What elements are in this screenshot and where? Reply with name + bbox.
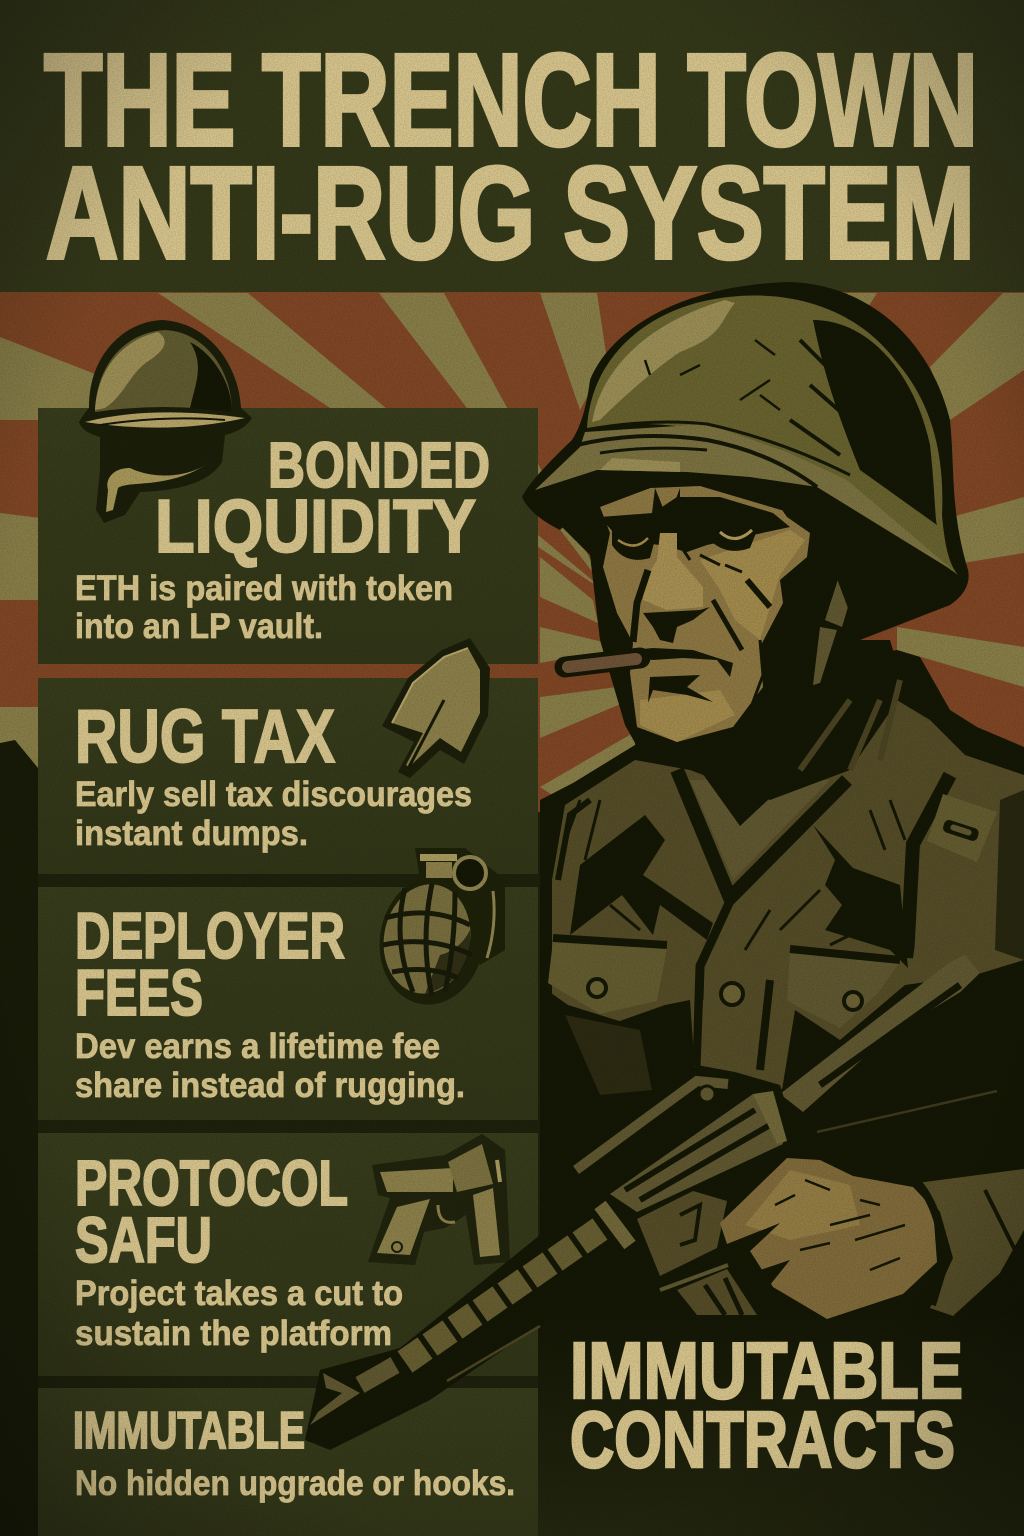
icon: pistol — [368, 1134, 510, 1265]
mouth — [633, 648, 733, 677]
description: Early sell tax discourages — [75, 775, 472, 814]
magazine — [677, 1269, 757, 1315]
panel: deployer fees: FEES — [75, 956, 203, 1029]
lower dark — [540, 960, 1024, 1250]
panel: protocol safu — [38, 1133, 538, 1376]
stock — [780, 955, 980, 1112]
shirt — [540, 690, 1024, 1250]
sleeve cuff — [915, 1169, 1024, 1316]
panel: bonded liquidity — [38, 320, 538, 664]
nose — [643, 533, 703, 610]
muzzle and front sight — [310, 1373, 360, 1425]
pockets — [548, 941, 667, 1014]
panel: bonded liquidity: into an LP vault. — [75, 607, 323, 646]
face — [600, 483, 810, 742]
shoulder strap tab — [927, 794, 997, 862]
soldier body silhouette — [540, 650, 1024, 1315]
title text — [44, 26, 978, 286]
eyes — [612, 528, 658, 560]
heading: BONDED — [268, 429, 490, 501]
chin strap — [813, 567, 860, 685]
icon: grenade — [370, 848, 505, 1013]
handguard sections — [405, 1229, 600, 1362]
description: No hidden upgrade or hooks. — [75, 1464, 515, 1503]
heading: DEPLOYER — [75, 899, 345, 972]
buttons — [588, 979, 862, 1010]
panel: deployer fees: share instead of rugging. — [75, 1066, 465, 1105]
panel: protocol safu: SAFU — [75, 1204, 212, 1276]
heading: RUG TAX — [75, 694, 335, 778]
hand — [720, 1158, 937, 1319]
rifle — [305, 955, 1003, 1450]
heading: IMMUTABLE — [73, 1402, 305, 1460]
illustration: soldier — [305, 282, 1024, 1450]
panel: deployer fees — [38, 848, 538, 1120]
head shadow — [560, 470, 950, 755]
description: Project takes a cut to — [75, 1274, 403, 1313]
carry handle — [576, 1081, 728, 1170]
brim — [535, 424, 955, 572]
brow — [600, 497, 790, 552]
left dark hill silhouette — [0, 740, 38, 1536]
panel: immutable — [38, 1388, 538, 1536]
sunburst background — [0, 292, 1024, 812]
description: Dev earns a lifetime fee — [75, 1027, 440, 1066]
title band — [0, 0, 1024, 292]
panel: rug tax — [38, 638, 538, 874]
helmet — [522, 282, 969, 640]
heading: PROTOCOL — [75, 1147, 348, 1219]
description: ETH is paired with token — [75, 569, 453, 608]
panel: protocol safu: sustain the platform — [75, 1314, 392, 1353]
silhouette — [305, 1065, 800, 1450]
panel: bonded liquidity: LIQUIDITY — [155, 484, 476, 568]
bottom right ground — [538, 1310, 1024, 1536]
panel: rug tax: instant dumps. — [75, 814, 308, 853]
icon: shovel — [382, 638, 490, 778]
icon: helmet — [79, 320, 252, 523]
receiver — [610, 1094, 783, 1212]
ear — [857, 563, 908, 620]
callout: immutable contracts — [570, 1326, 963, 1484]
neck — [640, 640, 905, 800]
cigar — [565, 658, 640, 667]
